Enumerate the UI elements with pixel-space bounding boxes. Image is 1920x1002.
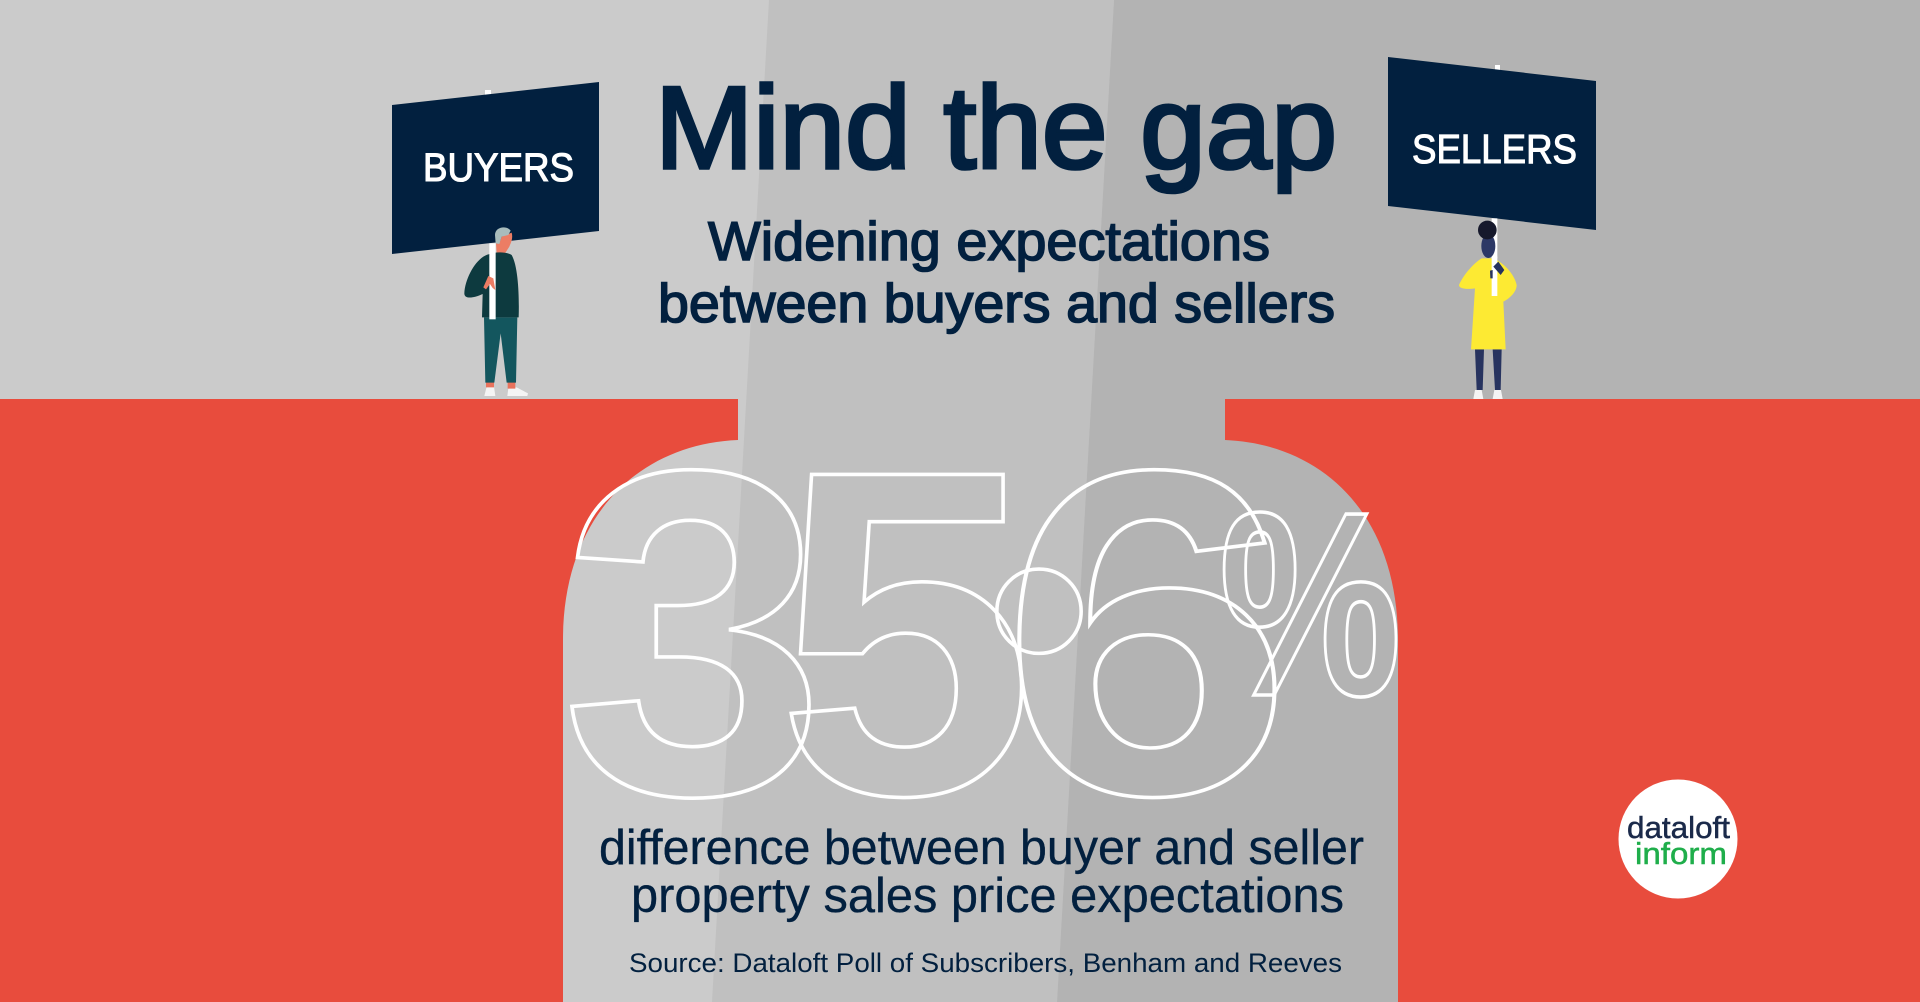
sign pole tip: [1495, 65, 1500, 71]
buyers sign: [392, 82, 599, 254]
buyers figure with sign: [392, 82, 599, 396]
big outlined figure 35.6%: 3: [561, 374, 826, 892]
subtitle: Widening expectations: [708, 210, 1270, 272]
subtitle: [658, 210, 1335, 334]
description text: difference between buyer and seller: [599, 821, 1364, 875]
red ground with the gap: [0, 399, 1920, 1002]
description text: [599, 821, 1364, 923]
logo: dataloft inform: [1618, 780, 1738, 898]
big outlined figure 35.6%: .: [974, 184, 1104, 759]
big outlined figure 35.6%: %: [1219, 456, 1401, 751]
sign pole tip: [485, 90, 491, 96]
logo: dataloft inform: dataloft: [1627, 810, 1730, 845]
big outlined figure 35.6%: 6: [1000, 375, 1294, 892]
source note: Source: Dataloft Poll of Subscribers, Benham and Reeves: [629, 948, 1342, 978]
big outlined figure 35.6%: 5: [777, 375, 1034, 892]
logo: dataloft inform: inform: [1635, 836, 1727, 871]
big outlined figure 35.6%: [561, 184, 1401, 892]
sellers label: SELLERS: [1412, 126, 1577, 172]
description text: property sales price expectations: [631, 869, 1344, 923]
sellers figure with sign: [1388, 57, 1596, 399]
sellers sign: [1388, 57, 1596, 230]
icon: seller person: [1459, 218, 1517, 399]
subtitle: between buyers and sellers: [658, 272, 1335, 334]
buyers label: BUYERS: [423, 146, 574, 190]
title: Mind the gap: [655, 62, 1337, 193]
icon: buyer person: [464, 227, 528, 396]
